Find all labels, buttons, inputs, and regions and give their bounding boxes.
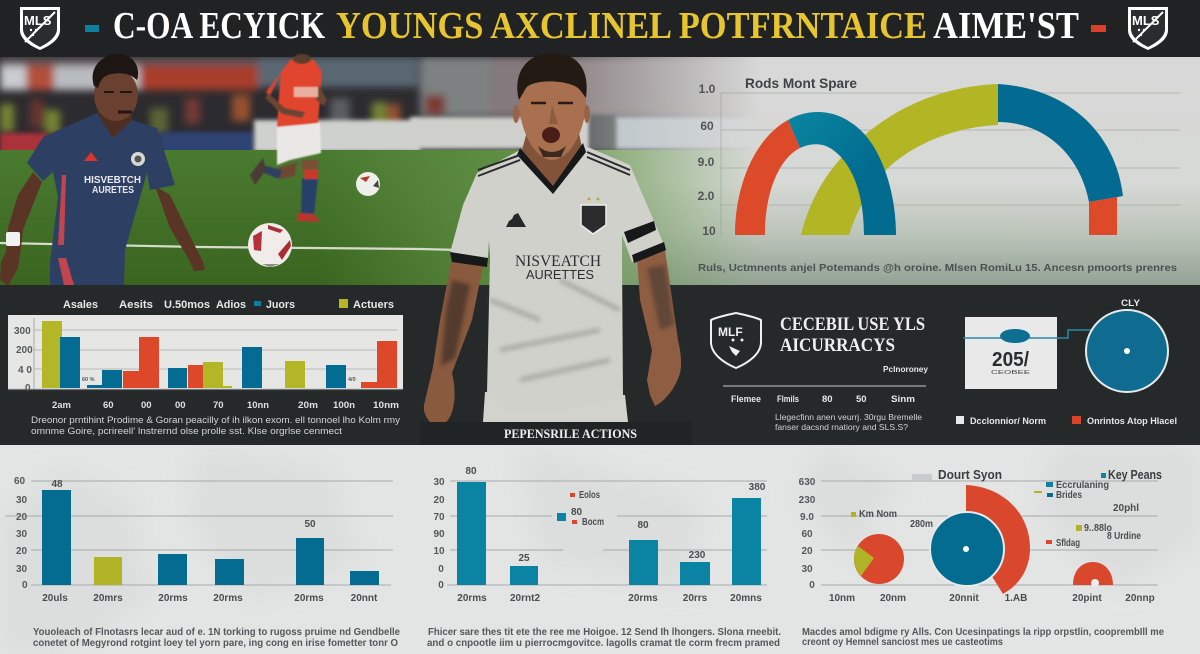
axis: 9.0 <box>800 512 814 523</box>
annotations: 280m <box>910 519 933 530</box>
logo: left MLS shield <box>20 7 60 50</box>
values: 50 <box>304 519 316 530</box>
x labels: 20rnt2 <box>510 593 540 604</box>
x labels: 20rms <box>213 593 243 604</box>
x labels: 20rms <box>628 593 658 604</box>
axis: 20 <box>801 546 813 557</box>
large red base <box>1089 197 1117 235</box>
x labels <box>829 593 1155 604</box>
axis: 30 <box>16 529 28 540</box>
big red arc <box>966 485 1030 594</box>
key heading: Key Peans <box>1108 467 1162 482</box>
panel: left bar chart: 2am <box>52 400 71 411</box>
axis: 30 <box>16 564 28 575</box>
title: C-OA ECYICK <box>113 5 325 47</box>
caption <box>802 626 1164 648</box>
panel: accuracy block <box>711 298 1177 432</box>
inline legend: Eolos <box>579 490 600 501</box>
axis: 30 <box>16 495 28 506</box>
dark panel band <box>0 285 1200 445</box>
x labels: 20rms <box>457 593 487 604</box>
gauge legend: Onrintos Atop Hlacel <box>1087 416 1177 427</box>
chart legend: Aesits <box>119 299 153 311</box>
circle gauge: CLY <box>1121 298 1140 308</box>
axis: 30 <box>433 477 445 488</box>
chart legend: Actuers <box>353 299 394 311</box>
y axis labels: 2.0 <box>698 189 715 203</box>
logo: right MLS shield: MLS <box>1132 13 1160 28</box>
axis: 20 <box>433 495 445 506</box>
big blue donut <box>930 512 1004 586</box>
title: AIME'ST <box>933 5 1079 47</box>
x labels <box>457 593 762 604</box>
left player in navy kit <box>0 54 205 286</box>
head and neck <box>97 105 132 140</box>
bars <box>42 490 379 585</box>
axis labels: 200 <box>16 345 33 356</box>
table labels: 50 <box>856 394 867 405</box>
block caption: Llegecfinn anen veurrj. 30rgu Bremelle <box>775 412 922 422</box>
x labels: 20rms <box>158 593 188 604</box>
panel: bottom light section <box>20 466 1180 632</box>
table labels: 80 <box>822 394 833 405</box>
caption <box>427 626 781 649</box>
adidas mark <box>506 213 526 227</box>
values: 80 <box>465 466 477 477</box>
neck and head <box>522 128 582 190</box>
icon: shield: MLF <box>718 325 743 339</box>
values <box>465 466 766 564</box>
x labels: 20rms <box>294 593 324 604</box>
annotations: Sfldag <box>1056 538 1080 549</box>
axis <box>799 477 816 591</box>
shorts <box>483 392 628 422</box>
half donut <box>1073 562 1113 587</box>
block caption: fanser dacsnd rnatiory and SLS.S? <box>775 422 908 432</box>
arms <box>0 172 42 286</box>
axis: 0 <box>438 580 444 591</box>
table labels: Sinm <box>891 394 915 405</box>
panel: left bar chart: 100n <box>333 400 355 411</box>
x labels: 20rrs <box>683 593 708 604</box>
values: 380 <box>749 482 766 493</box>
ball: distant <box>356 172 380 196</box>
small red arc <box>735 120 800 235</box>
panel: accuracy block: Pclnoroney <box>883 364 928 374</box>
axis: 230 <box>799 495 816 506</box>
axis labels: 4 0 <box>18 365 32 376</box>
chart caption <box>31 415 400 437</box>
x labels: 20mrs <box>93 593 123 604</box>
axis: 90 <box>433 529 445 540</box>
chart caption: omnme Goire, pcrireell' lnstrernd olse prolle sst. Klse orgrlse cenmect <box>31 426 342 437</box>
axis: 60 <box>801 529 813 540</box>
small pie <box>854 534 904 584</box>
axis: 20 <box>16 546 28 557</box>
axis: 0 <box>22 580 28 591</box>
panel: left bar chart <box>8 299 403 437</box>
axis labels <box>14 326 356 394</box>
title <box>85 5 1106 47</box>
x labels: 20nnt <box>351 593 378 604</box>
header bar <box>0 0 1200 57</box>
annotations: Km Nom <box>859 509 897 520</box>
jersey <box>450 145 665 413</box>
left player in navy kit: AURETES <box>92 185 134 196</box>
annotations: 9..88lo <box>1084 523 1112 534</box>
axis: 0 <box>438 564 444 575</box>
panel: left bar chart: 70 <box>213 400 224 411</box>
jersey sponsor: HISVEBTCH <box>84 175 141 186</box>
caption strip: actions <box>420 422 692 445</box>
chart legend: U.50mos <box>164 299 210 311</box>
caption: Fhicer sare thes tit ete the ree me Hoigoe. 12 Send Ih lhongers. Slona rneebit. <box>428 626 781 638</box>
caption: and o cnpootle iim u pierrocmgovitce. lagolls cramat tle corm frecm pramed <box>427 637 780 649</box>
chart legend <box>63 299 394 311</box>
values: 80 <box>637 520 649 531</box>
annotations: 20phl <box>1113 503 1139 514</box>
annotations: Eccrulaning <box>1056 480 1109 491</box>
chart: bottom centre bars <box>427 466 781 649</box>
jersey sponsor: NISVEATCH <box>515 253 601 270</box>
axis: 20 <box>16 512 28 523</box>
block caption <box>775 412 922 432</box>
caption: Youoleach of Flnotasrs lecar aud of e. 1N torking to rugoss pruime nd Gendbelle <box>33 626 400 638</box>
axis labels: 300 <box>14 326 31 337</box>
values <box>51 479 316 530</box>
axis <box>14 476 28 591</box>
collar and trim <box>517 143 586 194</box>
kit badge <box>581 205 606 234</box>
bars <box>42 321 397 388</box>
block heading: AICURRACYS <box>780 335 895 356</box>
stat card: 205/ <box>992 349 1029 371</box>
axis <box>433 477 445 591</box>
panel: left bar chart: 10nn <box>247 400 269 411</box>
chart: arc chart top right <box>698 75 1180 274</box>
stat card: CEOBEE <box>991 370 1031 376</box>
x labels: 20pint <box>1072 593 1102 604</box>
caption: conetet of Megyrond rotgint loey tel yorn pare, ing cong en irise fometter tonr O <box>33 637 398 649</box>
axis: 0 <box>809 580 815 591</box>
caption: creont oy Hemnel sanciost mes ue casteotims <box>802 636 1003 648</box>
right arm <box>637 250 681 406</box>
x labels: 20uls <box>42 593 68 604</box>
bars <box>457 482 761 585</box>
photo: stadium background <box>0 57 1200 285</box>
annotations: 8 Urdine <box>1107 531 1141 542</box>
y axis labels: 10 <box>702 224 716 238</box>
ball: foreground <box>248 223 292 267</box>
axis: 630 <box>799 477 816 488</box>
values: 230 <box>689 550 706 561</box>
axis: 60 <box>14 476 26 487</box>
inline legend: Bocm <box>582 517 604 528</box>
olive arc <box>801 84 998 235</box>
connector <box>963 330 1092 338</box>
values: 48 <box>51 479 63 490</box>
gauge legend <box>956 416 1177 427</box>
table labels <box>731 394 915 405</box>
inline legend: 80 <box>571 507 583 518</box>
logo: right MLS shield <box>1128 7 1168 50</box>
axis labels: 60 % <box>82 377 95 383</box>
chart: bottom right pies <box>799 467 1164 648</box>
logo: left MLS shield: MLS <box>24 13 52 28</box>
title: YOUNGS AXCLINEL POTFRNTAICE <box>336 5 927 47</box>
x labels: 1.AB <box>1005 593 1027 604</box>
stat card <box>965 317 1057 389</box>
chart heading: Rods Mont Spare <box>745 75 857 91</box>
inline legend <box>557 490 604 528</box>
axis labels: 4/0 <box>348 377 356 383</box>
axis labels: 0 <box>25 383 31 394</box>
panel: left bar chart: 00 <box>175 400 186 411</box>
panel: left bar chart: 20m <box>298 400 318 411</box>
annotations <box>851 480 1141 549</box>
caption strip: actions: PEPENSRILE ACTIONS <box>504 426 637 441</box>
chart caption: Ruls, Uctmnents anjel Potemands @h oroine. Mlsen RomiLu 15. Ancesn pmoorts prenres <box>698 263 1177 274</box>
small blue arc <box>788 112 896 235</box>
large blue arc <box>998 84 1123 202</box>
background player in red <box>250 54 327 222</box>
icon: shield <box>711 313 761 368</box>
caption <box>33 626 400 649</box>
annotations: Brides <box>1056 490 1082 501</box>
gauge legend: Dcclonnior/ Norm <box>970 416 1046 427</box>
panel: left bar chart: 10nm <box>373 400 399 411</box>
centre player in white kit: AURETTES <box>526 268 594 282</box>
jersey <box>27 113 175 285</box>
chart caption: Dreonor prntihint Prodime & Goran peacilly of ih ilkon exom. ell tonnoel lho Kolm rmy <box>31 415 400 426</box>
axis: 70 <box>433 512 445 523</box>
heading <box>912 467 1002 482</box>
y axis labels: 9.0 <box>698 155 715 169</box>
block heading: CECEBIL USE YLS <box>780 314 925 335</box>
y axis labels: 1.0 <box>699 82 716 96</box>
chart legend: Asales <box>63 299 98 311</box>
y axis labels <box>698 82 716 238</box>
panel: left bar chart: 60 <box>103 400 114 411</box>
centre player in white kit <box>424 53 681 426</box>
panel: left bar chart: 00 <box>141 400 152 411</box>
x labels: 20mns <box>730 593 762 604</box>
circle gauge <box>1086 298 1168 392</box>
chart legend: Adios <box>216 299 246 311</box>
x labels: 20nnit <box>949 593 979 604</box>
chart: bottom left bars <box>5 476 400 649</box>
chart legend: Juors <box>266 299 295 311</box>
values: 25 <box>518 553 530 564</box>
axis: 10 <box>433 546 445 557</box>
block heading <box>780 314 925 356</box>
left arm <box>424 258 484 426</box>
x labels: 10nm <box>829 593 855 604</box>
table labels: Flemee <box>731 394 761 405</box>
x labels: 20nnp <box>1125 593 1155 604</box>
axis: 30 <box>801 564 813 575</box>
caption: Macdes amol bdigme ry Alls. Con Ucesinpatings la ripp orpstlin, cooprembIll me <box>802 626 1164 638</box>
table labels: Flmils <box>777 394 799 405</box>
heading: Dourt Syon <box>938 467 1002 482</box>
x labels <box>42 593 378 604</box>
x labels: 20nm <box>880 593 906 604</box>
y axis labels: 60 <box>700 119 714 133</box>
